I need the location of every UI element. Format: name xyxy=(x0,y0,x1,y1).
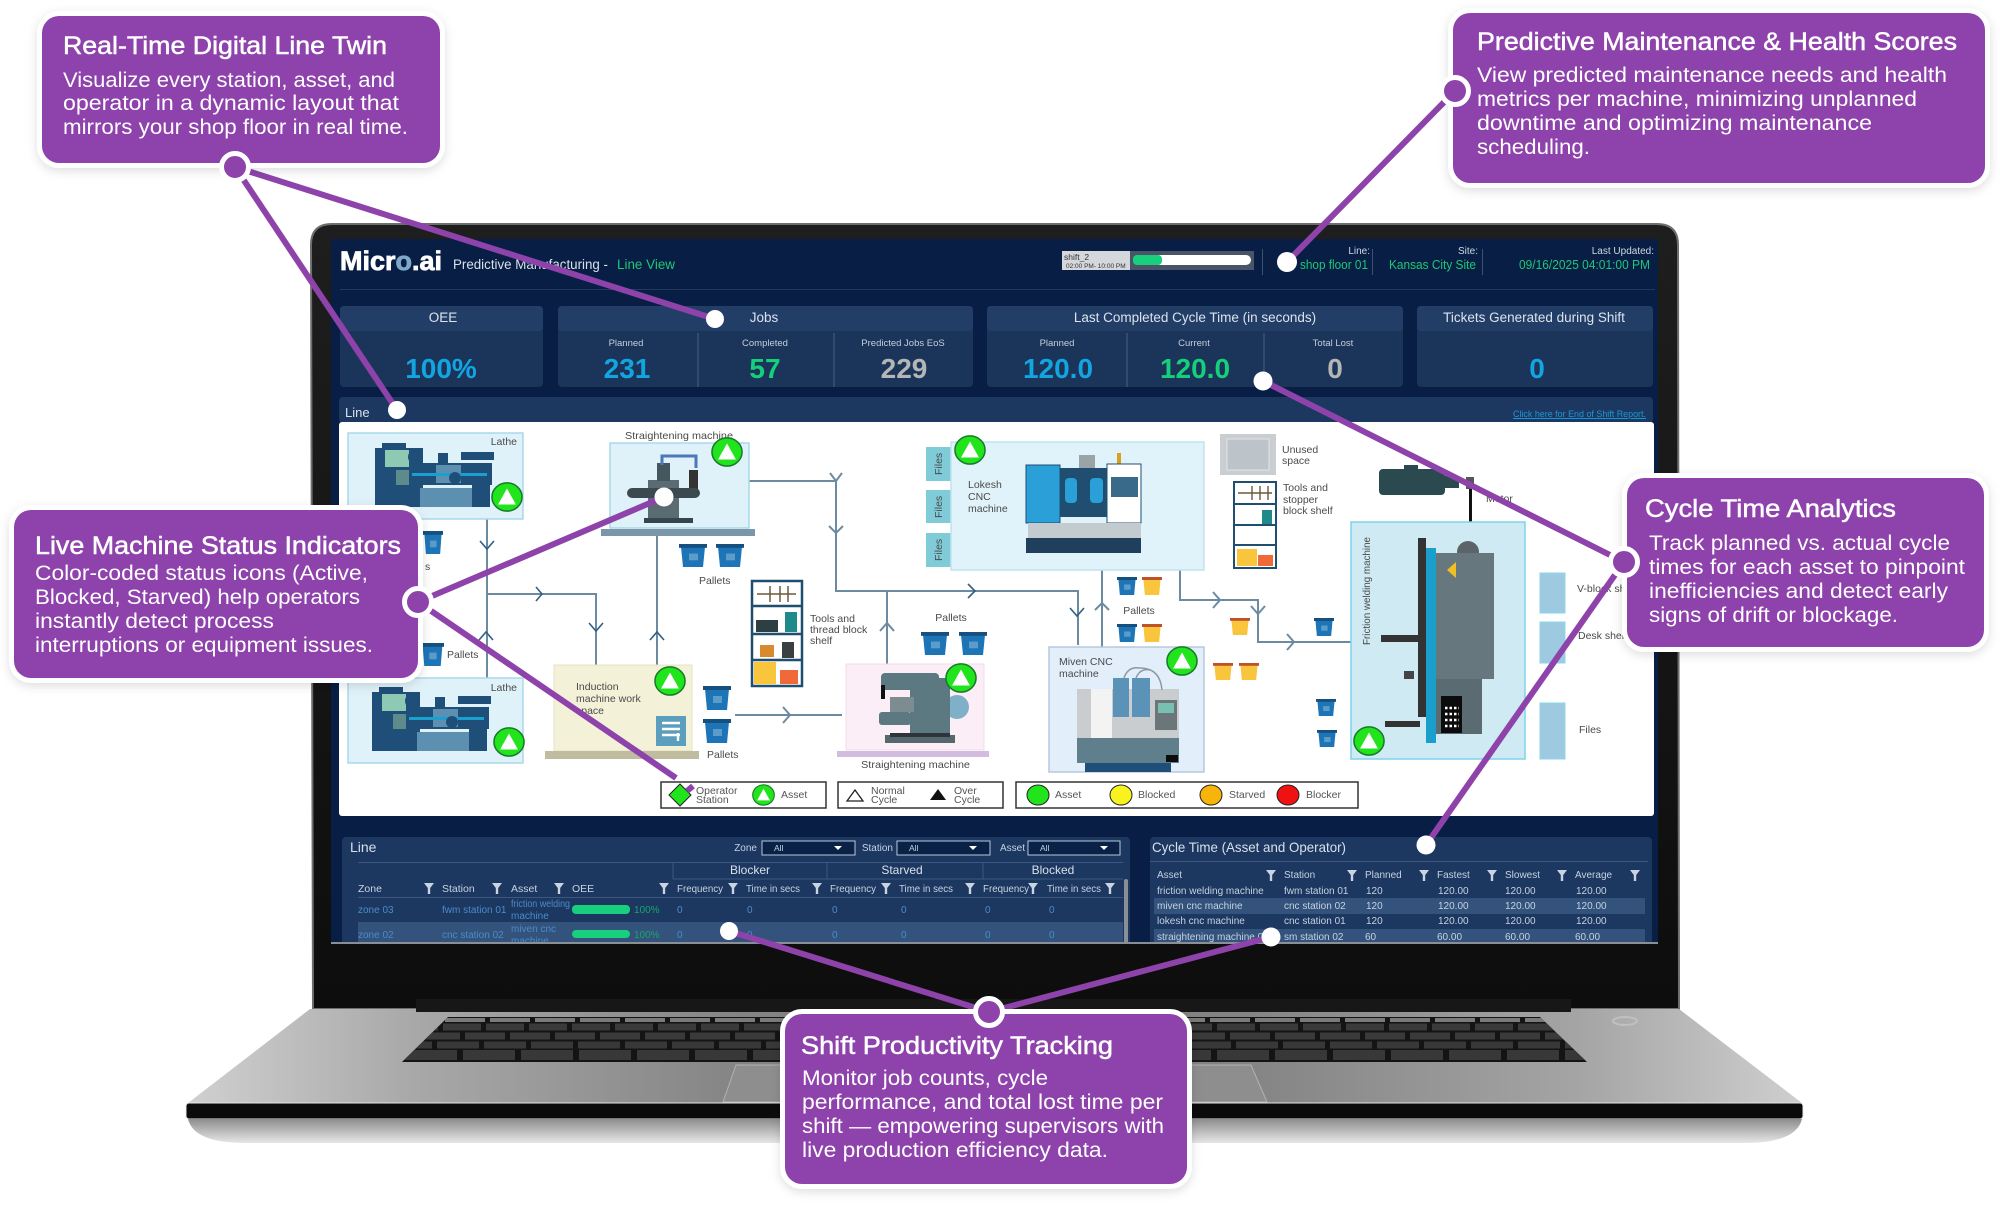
panel: OEE xyxy=(340,306,543,387)
row: zone 03: friction welding xyxy=(511,899,570,910)
callout: predictive maintenance: metrics per machine, minimizing unplanned xyxy=(1477,87,1917,111)
pallets above straightening machine 2 xyxy=(921,612,987,655)
unused space: Unused xyxy=(1282,444,1318,456)
table rows: miven cnc machine xyxy=(1157,901,1243,912)
connector lines xyxy=(235,91,1624,1012)
lower chrome xyxy=(188,1119,1802,1143)
induction machine work space xyxy=(545,665,699,759)
zone, station, asset filters xyxy=(734,841,1120,855)
column headers: Frequency xyxy=(830,883,877,895)
table rows: 120.00 xyxy=(1505,916,1536,927)
header line, site, date: Site: xyxy=(1458,246,1478,257)
lathe station 2 xyxy=(348,678,524,763)
legend: status colors: Asset xyxy=(1055,789,1081,801)
callout: shift productivity tracking: shift — empowering supervisors with xyxy=(802,1114,1164,1138)
panel: tickets: Tickets Generated during Shift xyxy=(1443,310,1625,325)
table rows: 120.00 xyxy=(1505,901,1536,912)
miven CNC machine: machine xyxy=(1059,668,1099,680)
callout: live machine status indicators: Color-coded status icons (Active, xyxy=(35,561,368,585)
table rows: 60.00 xyxy=(1575,932,1600,943)
tools and stopper block shelf: block shelf xyxy=(1283,505,1333,517)
line view label: Line View xyxy=(617,257,675,272)
row: zone 03: 0 xyxy=(985,905,991,916)
lokesh CNC machine: Files xyxy=(933,496,945,518)
panel: last completed cycle time: 0 xyxy=(1327,353,1343,384)
callout: shift productivity tracking: performance, and total lost time per xyxy=(802,1090,1163,1114)
row: zone 03: 100% xyxy=(634,905,660,916)
panel: last completed cycle time: 120.0 xyxy=(1160,353,1230,384)
lokesh CNC machine: CNC xyxy=(968,491,991,503)
legend: cycle: Normal xyxy=(871,785,905,797)
tools and thread block shelf: thread block xyxy=(810,624,868,636)
column headers: Time in secs xyxy=(746,883,800,895)
legend: cycle xyxy=(838,782,1003,808)
pallets under straightening machine xyxy=(679,544,744,587)
lathe station 1 xyxy=(348,433,523,519)
legend: status colors xyxy=(1016,782,1358,808)
side shelves: V-block shelf xyxy=(1577,583,1637,595)
table rows: cnc station 02 xyxy=(1284,901,1346,912)
induction machine work space: Induction xyxy=(576,681,619,693)
table rows: 120.00 xyxy=(1438,916,1469,927)
table header: Planned xyxy=(1365,870,1402,881)
callout: live machine status indicators: instantly detect process xyxy=(35,609,274,633)
callout: real-time digital line twin: Real-Time Digital Line Twin xyxy=(63,32,387,60)
panel: tickets xyxy=(1417,306,1653,387)
scrollbar xyxy=(1124,879,1128,944)
group headers xyxy=(673,862,1123,879)
legend: operator station and asset: Operator xyxy=(696,785,738,797)
hinge xyxy=(416,999,1571,1012)
laptop lid and bezel xyxy=(311,224,1679,1009)
callout: live machine status indicators: interruptions or equipment issues. xyxy=(35,633,373,657)
row: zone 02 xyxy=(358,922,1123,947)
panel: last completed cycle time: Planned xyxy=(1040,338,1074,349)
row: zone 02: machine xyxy=(511,936,549,947)
pallets near lathes: Pallets xyxy=(447,649,479,661)
straightening machine 1: Straightening machine xyxy=(625,430,733,442)
row: zone 03: 0 xyxy=(677,905,683,916)
row: zone 02: 0 xyxy=(1049,930,1055,941)
legend: cycle: Cycle xyxy=(871,794,897,806)
legend: operator station and asset: Asset xyxy=(781,789,807,801)
callout: live machine status indicators xyxy=(14,510,432,678)
row: zone 02: miven cnc xyxy=(511,924,556,935)
tools and stopper block shelf: stopper xyxy=(1283,494,1319,506)
header line, site, date: Kansas City Site xyxy=(1389,258,1476,272)
callout: shift productivity tracking: Shift Productivity Tracking xyxy=(801,1032,1113,1060)
table rows: 120.00 xyxy=(1505,886,1536,897)
group headers: Blocked xyxy=(1032,863,1074,877)
table header: Average xyxy=(1575,870,1613,881)
callout: shift productivity tracking: Monitor job counts, cycle xyxy=(802,1066,1048,1090)
friction welding machine xyxy=(1351,522,1525,759)
lathe station 1: Lathe xyxy=(491,436,517,448)
column headers: Asset xyxy=(511,883,537,895)
legend: status colors: Blocker xyxy=(1306,789,1342,801)
table rows: cnc station 01 xyxy=(1284,916,1346,927)
table rows: 120.00 xyxy=(1576,901,1607,912)
callout: predictive maintenance: Predictive Maintenance & Health Scores xyxy=(1477,28,1957,56)
zone, station, asset filters: Station xyxy=(862,843,893,854)
table rows: 120 xyxy=(1366,886,1383,897)
table rows: 120.00 xyxy=(1438,901,1469,912)
tools and stopper block shelf: Tools and xyxy=(1283,482,1328,494)
tools and thread block shelf xyxy=(752,581,868,686)
panel: cycle time table xyxy=(1150,837,1652,947)
table rows: 60 xyxy=(1365,932,1377,943)
column headers: Time in secs xyxy=(1047,883,1101,895)
tools and thread block shelf: Tools and xyxy=(810,613,855,625)
pallets around miven: Pallets xyxy=(1123,605,1155,617)
row: zone 03: fwm station 01 xyxy=(442,905,507,916)
header line, site, date xyxy=(1262,246,1654,275)
legend: status colors: Starved xyxy=(1229,789,1265,801)
table header xyxy=(1157,870,1640,881)
callout: real-time digital line twin: mirrors your shop floor in real time. xyxy=(63,115,408,139)
trackpad xyxy=(723,1065,1267,1102)
callout: predictive maintenance: scheduling. xyxy=(1477,135,1590,159)
shift progress xyxy=(1062,251,1254,270)
row: zone 02: 0 xyxy=(677,930,683,941)
flow connectors xyxy=(479,473,1351,723)
table rows: friction welding machine xyxy=(1157,886,1264,897)
legend: status colors: Blocked xyxy=(1138,789,1176,801)
panel: line table xyxy=(342,837,1130,947)
row: zone 03: 0 xyxy=(832,905,838,916)
callout: shift productivity tracking: live production efficiency data. xyxy=(802,1138,1108,1162)
logo: Micro.ai xyxy=(340,246,442,276)
laptop xyxy=(186,224,1803,1143)
group headers: Starved xyxy=(881,863,923,877)
row: zone 02: 0 xyxy=(901,930,907,941)
motor xyxy=(1379,465,1513,522)
side shelves xyxy=(1540,572,1624,760)
table header: Asset xyxy=(1157,870,1182,881)
row: zone 03: 0 xyxy=(901,905,907,916)
table header: Station xyxy=(1284,870,1315,881)
column headers xyxy=(358,883,1115,895)
lokesh CNC machine: Files xyxy=(933,539,945,561)
row: zone 03: machine xyxy=(511,911,549,922)
pallets under straightening machine: Pallets xyxy=(699,575,731,587)
callout: cycle time analytics xyxy=(1610,478,1984,647)
table rows: fwm station 01 xyxy=(1284,886,1349,897)
row: zone 03: zone 03 xyxy=(358,905,394,916)
panel: last completed cycle time: Last Completed Cycle Time (in seconds) xyxy=(1074,310,1316,325)
table header: Fastest xyxy=(1437,870,1470,881)
zone, station, asset filters: All xyxy=(909,843,919,853)
table rows xyxy=(1157,886,1607,943)
table rows: 60.00 xyxy=(1505,932,1530,943)
callout: predictive maintenance xyxy=(1442,13,1985,183)
panel: jobs: Jobs xyxy=(750,310,779,325)
lokesh CNC machine: Lokesh xyxy=(968,479,1002,491)
zone, station, asset filters: All xyxy=(1040,843,1050,853)
column headers: Zone xyxy=(358,883,382,895)
line view header: Line xyxy=(345,405,370,420)
unused space xyxy=(1220,434,1318,475)
panel: jobs: Completed xyxy=(742,338,788,349)
table rows: 120 xyxy=(1366,916,1383,927)
pallets near induction xyxy=(703,686,739,761)
panel: last completed cycle time xyxy=(987,306,1403,387)
pallets around miven xyxy=(1117,577,1337,747)
callout: real-time digital line twin: Visualize every station, asset, and xyxy=(63,68,395,92)
legend: cycle: Over xyxy=(954,785,977,797)
row: zone 02: cnc station 02 xyxy=(442,930,504,941)
legend: operator station and asset xyxy=(661,782,826,808)
lokesh CNC machine: Files xyxy=(933,453,945,475)
side shelves: Desk shelf xyxy=(1578,630,1627,642)
callout: cycle time analytics: times for each asset to pinpoint xyxy=(1649,555,1965,579)
callout: predictive maintenance: View predicted maintenance needs and health xyxy=(1477,63,1947,87)
callout: predictive maintenance: downtime and optimizing maintenance xyxy=(1477,111,1872,135)
legend: cycle: Cycle xyxy=(954,794,980,806)
shift progress: 02:00 PM- 10:00 PM xyxy=(1066,263,1126,270)
panel: cycle time table: Cycle Time (Asset and Operator) xyxy=(1152,839,1346,855)
dashboard title: Predictive Manufacturing - xyxy=(453,257,608,272)
callout: cycle time analytics: Cycle Time Analytics xyxy=(1645,495,1896,523)
connector end dots xyxy=(388,252,1436,946)
table rows: 60.00 xyxy=(1437,932,1462,943)
shift progress: shift_2 xyxy=(1064,252,1089,262)
straightening machine 2 xyxy=(837,664,989,771)
header line, site, date: Last Updated: xyxy=(1592,246,1654,257)
legend: operator station and asset: Station xyxy=(696,794,729,806)
zone, station, asset filters: All xyxy=(774,843,784,853)
callout: live machine status indicators: Blocked, Starved) help operators xyxy=(35,585,360,609)
header line, site, date: shop floor 01 xyxy=(1300,258,1368,272)
induction machine work space: space xyxy=(576,705,604,717)
miven CNC machine: Miven CNC xyxy=(1059,656,1113,668)
straightening machine 2: Straightening machine xyxy=(861,759,970,771)
panel: jobs: 231 xyxy=(604,353,650,384)
table rows: lokesh cnc machine xyxy=(1157,916,1245,927)
laptop base xyxy=(188,1009,1802,1103)
panel: tickets: 0 xyxy=(1529,353,1545,384)
callout: cycle time analytics: inefficiencies and detect early xyxy=(1649,579,1948,603)
callout: cycle time analytics: Track planned vs. actual cycle xyxy=(1649,531,1950,555)
lokesh CNC machine xyxy=(926,436,1204,570)
group headers: Blocker xyxy=(730,863,770,877)
table rows: 120.00 xyxy=(1576,886,1607,897)
panel: jobs xyxy=(558,306,973,387)
panel: jobs: Planned xyxy=(609,338,643,349)
dashboard screen xyxy=(331,239,1658,947)
table rows: straightening machine 02 xyxy=(1157,932,1269,943)
row: zone 03 xyxy=(358,899,1055,922)
panel: jobs: 57 xyxy=(749,353,781,384)
panel: OEE: 100% xyxy=(405,353,477,384)
panel: OEE: OEE xyxy=(429,310,457,325)
row: zone 02: 0 xyxy=(832,930,838,941)
table rows: sm station 02 xyxy=(1284,932,1344,943)
zone, station, asset filters: Zone xyxy=(734,843,757,854)
panel: jobs: 229 xyxy=(881,353,927,384)
callout: real-time digital line twin xyxy=(42,16,440,180)
power logo xyxy=(1613,1017,1637,1025)
miven CNC machine xyxy=(1049,647,1204,772)
pallets above straightening machine 2: Pallets xyxy=(935,612,967,624)
line view header xyxy=(339,397,1653,423)
friction welding machine: Friction welding machine xyxy=(1361,537,1373,645)
line diagram xyxy=(339,422,1654,816)
panel: last completed cycle time: 120.0 xyxy=(1023,353,1093,384)
column headers: Frequency xyxy=(677,883,724,895)
unused space: space xyxy=(1282,455,1310,467)
panel: jobs: Predicted Jobs EoS xyxy=(861,338,945,349)
header line, site, date: 09/16/2025 04:01:00 PM xyxy=(1519,258,1650,272)
front edge xyxy=(186,1103,1803,1119)
table header: Slowest xyxy=(1505,870,1540,881)
callout: live machine status indicators: Live Machine Status Indicators xyxy=(35,532,401,560)
induction machine work space: machine work xyxy=(576,693,642,705)
row: zone 03: 0 xyxy=(1049,905,1055,916)
column headers: Frequency xyxy=(983,883,1030,895)
table rows: 120.00 xyxy=(1438,886,1469,897)
callout: shift productivity tracking xyxy=(785,998,1187,1184)
table rows: 120.00 xyxy=(1576,916,1607,927)
panel: last completed cycle time: Total Lost xyxy=(1313,338,1354,349)
row: zone 02: 0 xyxy=(985,930,991,941)
pallets near lathes: s xyxy=(425,561,430,573)
panel: line table: Line xyxy=(350,839,377,855)
straightening machine 1 xyxy=(601,430,755,536)
line view header: Click here for End of Shift Report. xyxy=(1513,409,1646,420)
side shelves: Files xyxy=(1579,724,1601,736)
callout: real-time digital line twin: operator in a dynamic layout that xyxy=(63,91,399,115)
tools and stopper block shelf xyxy=(1234,482,1333,568)
column headers: Station xyxy=(442,883,475,895)
row: zone 02: 0 xyxy=(747,930,753,941)
tools and thread block shelf: shelf xyxy=(810,635,832,647)
pallets near lathes xyxy=(421,531,479,666)
zone, station, asset filters: Asset xyxy=(1000,843,1025,854)
screen bottom edge xyxy=(331,942,1658,944)
table rows: 120 xyxy=(1366,901,1383,912)
callout: cycle time analytics: signs of drift or blockage. xyxy=(1649,603,1898,627)
pallets near induction: Pallets xyxy=(707,749,739,761)
lathe station 2: Lathe xyxy=(491,682,517,694)
row: zone 03: 0 xyxy=(747,905,753,916)
header line, site, date: Line: xyxy=(1348,246,1370,257)
keyboard xyxy=(390,1017,1600,1063)
motor: Motor xyxy=(1486,493,1513,505)
column headers: OEE xyxy=(572,883,594,895)
column headers: Time in secs xyxy=(899,883,953,895)
row: zone 02: zone 02 xyxy=(358,930,394,941)
panel: last completed cycle time: Current xyxy=(1178,338,1210,349)
row: zone 02: 100% xyxy=(634,930,660,941)
lokesh CNC machine: machine xyxy=(968,503,1008,515)
